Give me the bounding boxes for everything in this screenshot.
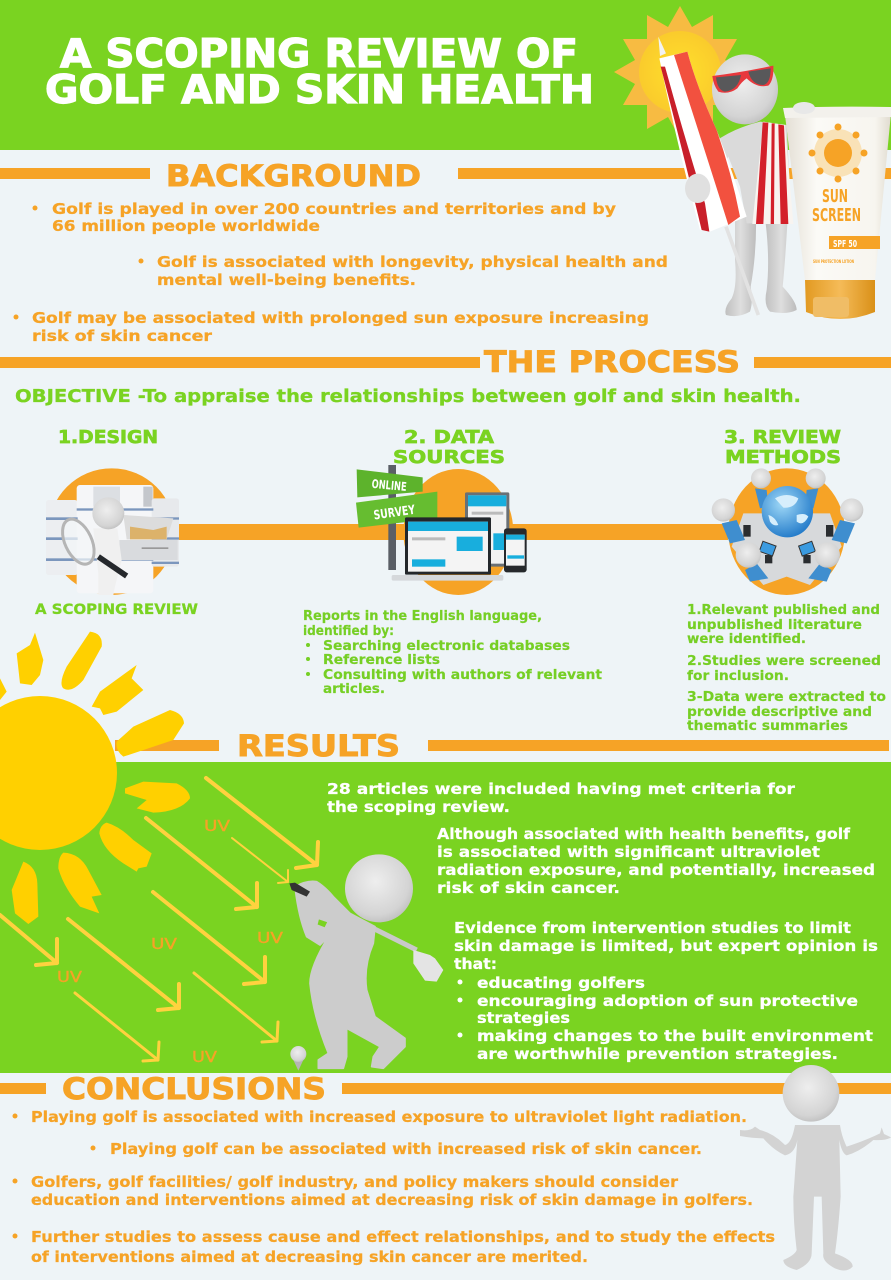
background bullets: Golf is played in over 200 countries and territories and by bbox=[52, 200, 616, 218]
background bullets: Golf may be associated with prolonged sun exposure increasing bbox=[32, 309, 649, 327]
sunglasses bbox=[712, 66, 773, 93]
step 2 text: Reference lists bbox=[323, 652, 440, 668]
hand on tube bbox=[793, 102, 815, 114]
sun logo on tube bbox=[808, 124, 868, 182]
umbrella bbox=[658, 37, 747, 232]
title: A SCOPING REVIEW OF bbox=[60, 32, 578, 77]
background bullets bbox=[14, 200, 668, 345]
tube label: SPF 50 bbox=[833, 239, 857, 250]
results text: Evidence from intervention studies to limit bbox=[454, 919, 852, 937]
step 2 text bbox=[303, 608, 603, 697]
figure legs bbox=[725, 217, 797, 316]
conclusions bullets: of interventions aimed at decreasing skin cancer are merited. bbox=[31, 1248, 588, 1266]
results text: is associated with significant ultraviolet bbox=[437, 843, 821, 861]
step 1: design bbox=[35, 427, 198, 618]
UV labels: UV bbox=[204, 817, 231, 835]
background bullets: Golf is associated with longevity, physical health and bbox=[157, 253, 668, 271]
UV labels: UV bbox=[257, 929, 284, 947]
step 3 text: provide descriptive and bbox=[687, 704, 872, 720]
results text: 28 articles were included having met criteria for bbox=[327, 780, 795, 798]
signs: ONLINE bbox=[371, 477, 407, 494]
title: GOLF AND SKIN HEALTH bbox=[45, 68, 594, 113]
tube label bbox=[812, 186, 880, 265]
step 2 heading: 2. DATA bbox=[404, 427, 494, 448]
conclusions bullets bbox=[12, 1108, 775, 1266]
signs bbox=[356, 469, 437, 528]
tube label: SUN bbox=[822, 186, 848, 207]
UV labels: UV bbox=[192, 1048, 218, 1066]
heading: conclusions: CONCLUSIONS bbox=[62, 1072, 326, 1106]
golfer body bbox=[295, 881, 405, 1068]
step 2 text: identified by: bbox=[303, 623, 394, 639]
phone bbox=[504, 528, 527, 572]
tube label: SCREEN bbox=[812, 205, 861, 226]
icon: online survey signpost and devices bbox=[356, 465, 527, 595]
heading: the process: THE PROCESS bbox=[484, 345, 740, 379]
step 3 heading bbox=[724, 427, 841, 468]
step 3 text: were identified. bbox=[687, 631, 806, 647]
icon: servers and figure with magnifier bbox=[46, 468, 179, 595]
results text: strategies bbox=[477, 1009, 570, 1027]
step 1 heading: 1.DESIGN bbox=[58, 427, 158, 448]
header band bbox=[0, 0, 891, 150]
laptop bbox=[392, 517, 503, 581]
UV labels: UV bbox=[151, 935, 178, 953]
umbrella stick bbox=[726, 227, 758, 315]
tube label: SUN PROTECTION LOTION bbox=[813, 259, 854, 265]
results text: skin damage is limited, but expert opinion is bbox=[454, 937, 878, 955]
results text: educating golfers bbox=[477, 974, 645, 992]
step 1 caption: A SCOPING REVIEW bbox=[35, 602, 198, 618]
step 3 text: for inclusion. bbox=[687, 668, 789, 684]
step 3 heading: 3. REVIEW bbox=[724, 427, 841, 448]
step 3 text: 2.Studies were screened bbox=[687, 653, 881, 669]
conclusions bullets: Further studies to assess cause and effect relationships, and to study the effects bbox=[31, 1228, 775, 1246]
striped towel bbox=[752, 122, 793, 224]
step 2: data sources bbox=[303, 427, 603, 697]
results section rule bbox=[115, 740, 889, 751]
results text: radiation exposure, and potentially, increased bbox=[437, 861, 875, 879]
step 2 text: articles. bbox=[323, 681, 385, 697]
arrows: UV rays bbox=[0, 778, 318, 1061]
figure torso bbox=[707, 122, 792, 223]
step 3 text: 1.Relevant published and bbox=[687, 602, 880, 618]
UV labels: UV bbox=[57, 968, 83, 986]
conclusions section rule bbox=[0, 1083, 891, 1094]
icon: shrugging figure bbox=[740, 1065, 891, 1270]
golfer grip bbox=[289, 883, 310, 897]
step 2 text: Reports in the English language, bbox=[303, 608, 542, 624]
results text bbox=[327, 780, 878, 1063]
step 3 text: 3-Data were extracted to bbox=[687, 689, 886, 705]
results text: making changes to the built environment bbox=[477, 1027, 874, 1045]
results text: encouraging adoption of sun protective bbox=[477, 992, 858, 1010]
icon: figure with sunglasses, beach umbrella and towel bbox=[658, 37, 797, 316]
hand on umbrella bbox=[685, 174, 710, 203]
background bullets: risk of skin cancer bbox=[32, 327, 212, 345]
step 3 text bbox=[687, 602, 886, 734]
tablet bbox=[465, 492, 509, 567]
golf ball on tee bbox=[290, 1046, 306, 1071]
title bbox=[45, 32, 594, 113]
results panel bbox=[0, 762, 891, 1073]
step 3 text: unpublished literature bbox=[687, 617, 862, 633]
step 2 heading: SOURCES bbox=[393, 447, 505, 468]
step 3 text: thematic summaries bbox=[687, 718, 848, 734]
results text: risk of skin cancer. bbox=[437, 879, 620, 897]
heading: background: BACKGROUND bbox=[166, 159, 421, 193]
step 2 text: Consulting with authors of relevant bbox=[323, 667, 603, 683]
step 2 text: Searching electronic databases bbox=[323, 638, 570, 654]
conclusions bullets: Playing golf is associated with increased exposure to ultraviolet light radiation. bbox=[31, 1108, 747, 1126]
figure head bbox=[712, 54, 778, 124]
background bullets: mental well-being benefits. bbox=[157, 271, 416, 289]
golf club shaft bbox=[373, 928, 417, 950]
background section rule bbox=[0, 168, 891, 179]
signs: SURVEY bbox=[373, 502, 417, 522]
results text: that: bbox=[454, 955, 497, 973]
results text: the scoping review. bbox=[327, 798, 510, 816]
results text: are worthwhile prevention strategies. bbox=[477, 1045, 838, 1063]
UV labels bbox=[57, 817, 284, 1066]
objective: OBJECTIVE -To appraise the relationships between golf and skin health. bbox=[15, 387, 801, 407]
icon: golfer bbox=[289, 854, 443, 1071]
golfer head bbox=[345, 854, 413, 922]
results text: Although associated with health benefits, golf bbox=[437, 825, 850, 843]
process section rule bbox=[0, 357, 891, 368]
icon: sunscreen tube bbox=[783, 102, 891, 319]
heading: results: RESULTS bbox=[237, 729, 400, 763]
step 3: review methods bbox=[687, 427, 886, 734]
conclusions bullets: Golfers, golf facilities/ golf industry, and policy makers should consider bbox=[31, 1173, 678, 1191]
conclusions bullets: education and interventions aimed at decreasing risk of skin damage in golfers. bbox=[31, 1191, 753, 1209]
process connector bbox=[178, 524, 728, 540]
background bullets: 66 million people worldwide bbox=[52, 217, 320, 235]
icon: team around a globe bbox=[712, 468, 863, 595]
icon: cartoon sun behind figure bbox=[614, 6, 746, 138]
step 2 heading bbox=[393, 427, 505, 468]
icon: large sun with rays bbox=[0, 632, 190, 924]
conclusions bullets: Playing golf can be associated with increased risk of skin cancer. bbox=[110, 1140, 702, 1158]
step 3 heading: METHODS bbox=[725, 447, 841, 468]
golfer hand and club head bbox=[413, 950, 443, 982]
